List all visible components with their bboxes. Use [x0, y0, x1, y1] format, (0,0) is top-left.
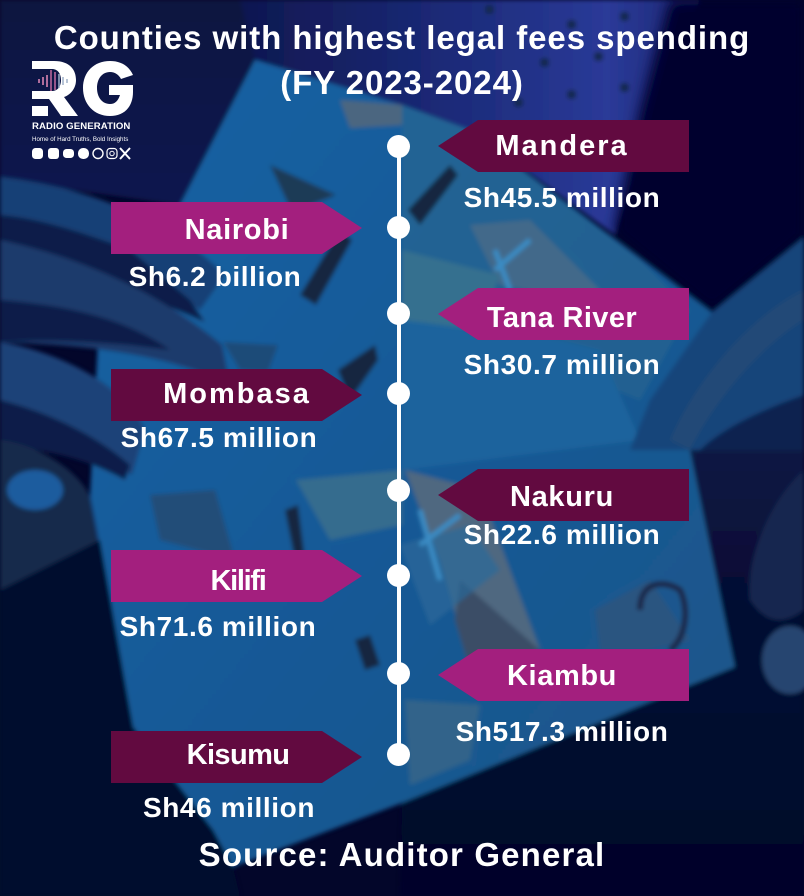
timeline node: Nairobi	[387, 216, 410, 239]
timeline node: Mombasa	[387, 382, 410, 405]
logo: Radio Generation	[32, 61, 133, 160]
upper left dark area	[0, 0, 300, 205]
amount: Mombasa: Sh67.5 million	[121, 422, 317, 453]
label: Nairobi: Nairobi	[185, 214, 289, 246]
label: Kiambu	[438, 649, 689, 701]
social icons	[32, 147, 131, 160]
amount: Tana River: Sh30.7 million	[464, 349, 660, 380]
timeline node: Kilifi	[387, 564, 410, 587]
label: Nairobi	[111, 202, 362, 254]
lower left dark area	[0, 540, 240, 896]
label: Kilifi	[111, 550, 362, 602]
label: Mombasa	[111, 369, 362, 421]
banknote	[90, 60, 735, 867]
amount: Mandera: Sh45.5 million	[464, 182, 660, 213]
label: Kisumu: Kisumu	[187, 739, 289, 771]
label: Mandera: Mandera	[495, 130, 629, 162]
label: Kilifi: Kilifi	[210, 565, 266, 597]
timeline node: Kisumu	[387, 743, 410, 766]
banknote light areas and prints	[402, 105, 690, 400]
label: Kisumu	[111, 731, 362, 783]
label: Nakuru: Nakuru	[510, 481, 614, 513]
left hand fingers	[0, 177, 225, 310]
label: Mandera	[438, 120, 689, 172]
label: Nakuru	[438, 469, 689, 521]
source: Source: Auditor General	[199, 836, 605, 873]
amount: Kiambu: Sh517.3 million	[456, 716, 668, 747]
amount: Kilifi: Sh71.6 million	[120, 611, 316, 642]
fabric	[240, 0, 700, 235]
timeline node: Kiambu	[387, 662, 410, 685]
timeline: vertical line	[396, 146, 400, 754]
amount: Kisumu: Sh46 million	[143, 792, 315, 823]
timeline node: Tana River	[387, 302, 410, 325]
amount: Nakuru: Sh22.6 million	[464, 519, 660, 550]
title: (FY 2023-2024)	[280, 64, 524, 101]
title: Counties with highest legal fees spending	[54, 19, 750, 56]
logo mark RG	[32, 61, 133, 116]
logo wordmark: RADIO GENERATION	[32, 121, 130, 132]
right hand fingers	[630, 237, 804, 450]
amount: Nairobi: Sh6.2 billion	[129, 261, 301, 292]
timeline node: Mandera	[387, 135, 410, 158]
label: Mombasa: Mombasa	[163, 378, 311, 410]
label: Tana River: Tana River	[487, 302, 637, 334]
timeline node: Nakuru	[387, 479, 410, 502]
label: Kiambu: Kiambu	[507, 660, 617, 692]
label: Tana River	[438, 288, 689, 340]
title	[54, 19, 750, 101]
dark right wedge	[614, 0, 804, 312]
logo tagline: Home of Hard Truths, Bold Insights	[32, 136, 128, 143]
